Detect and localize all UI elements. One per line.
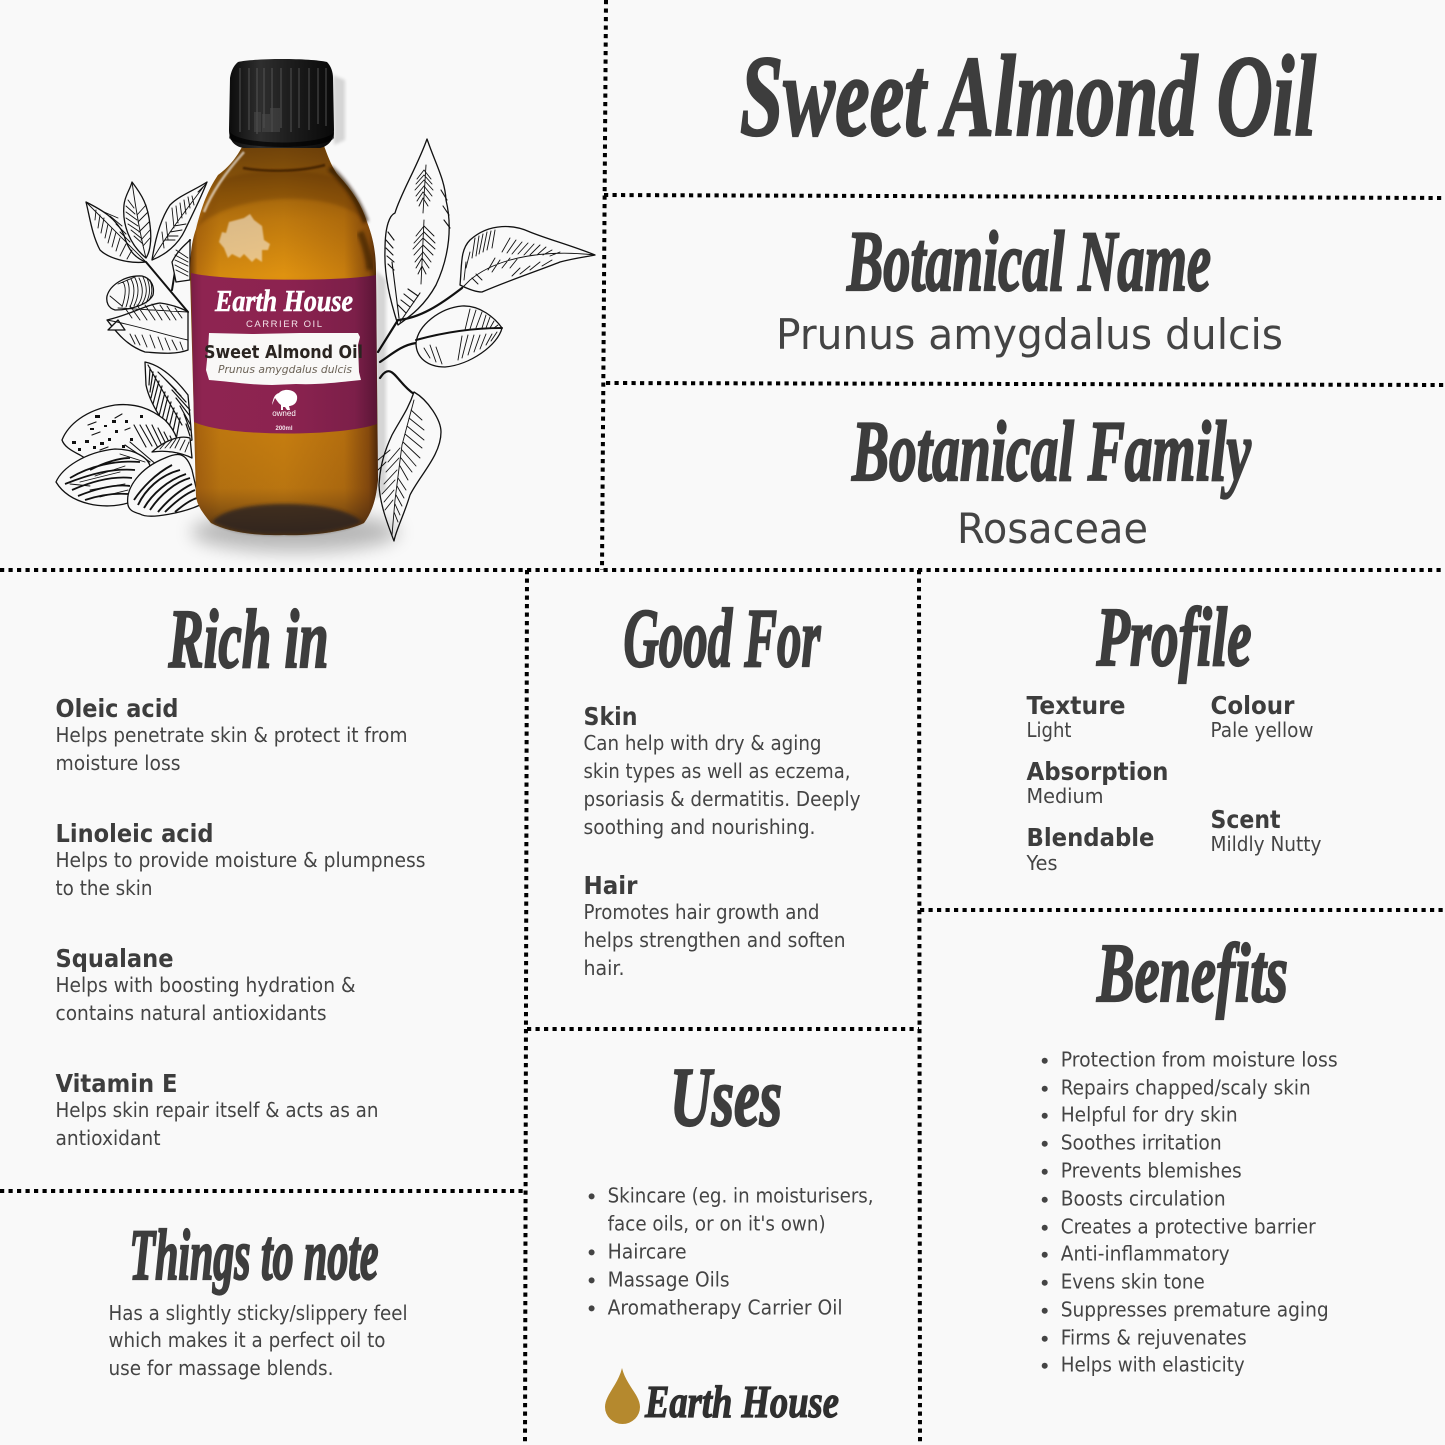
heading: Uses (670, 1051, 782, 1144)
label latin name: Prunus amygdalus dulcis (218, 364, 353, 376)
logo: earth house (605, 1368, 839, 1427)
item: squalane: Squalane (56, 944, 174, 973)
profile: texture: Light (1026, 718, 1072, 742)
neck oil line (243, 165, 325, 171)
profile: colour: Colour (1210, 691, 1295, 720)
heading: Profile (1096, 591, 1252, 684)
item: oleic acid: Helps penetrate skin & protect it from (56, 723, 408, 747)
heading: Rich in (168, 593, 328, 686)
note text: which makes it a perfect oil to (108, 1328, 386, 1352)
almond: speckled shell (62, 405, 180, 472)
item: skin: Skin (584, 702, 638, 731)
label white brush strip (206, 333, 361, 385)
bottle photograph drawn with gradients (190, 59, 399, 552)
profile: texture (1026, 691, 1126, 742)
profile: blendable: Blendable (1026, 823, 1154, 852)
label volume: 200ml (275, 426, 293, 432)
panel: profile (1026, 591, 1322, 875)
benefits list: Protection from moisture loss (1061, 1048, 1338, 1072)
profile: scent: Scent (1210, 805, 1281, 834)
item: oleic acid: Oleic acid (56, 694, 178, 723)
item: squalane (56, 944, 356, 1025)
benefits list: Firms & rejuvenates (1061, 1326, 1247, 1350)
benefits list: Prevents blemishes (1061, 1159, 1242, 1183)
heading: Botanical Name (846, 213, 1211, 309)
label (191, 273, 377, 434)
item: vitamin e: antioxidant (56, 1126, 160, 1150)
leaves: upper left sprig (86, 182, 207, 312)
profile: blendable: Yes (1026, 851, 1058, 875)
item: squalane: Helps with boosting hydration & (56, 973, 356, 997)
panel: things to note (108, 1215, 408, 1380)
item: skin: Can help with dry & aging (584, 731, 822, 755)
leaf: upper right (385, 139, 450, 325)
benefits list: Boosts circulation (1061, 1187, 1226, 1211)
item: vitamin e: Helps skin repair itself & acts as an (56, 1098, 378, 1122)
profile: scent (1210, 805, 1322, 856)
profile: colour: Pale yellow (1210, 718, 1314, 742)
panel: botanical name (776, 213, 1283, 359)
profile: blendable (1026, 823, 1154, 875)
note text (108, 1301, 408, 1380)
item: skin: psoriasis & dermatitis. Deeply (584, 787, 860, 811)
item: hair: helps strengthen and soften (584, 928, 846, 952)
leaf: left lower sprig (107, 303, 188, 353)
logo wordmark: Earth House (644, 1376, 839, 1427)
almond: left kernel (56, 449, 150, 506)
item: linoleic acid: Linoleic acid (56, 819, 214, 848)
benefits list: Evens skin tone (1061, 1270, 1205, 1294)
item: hair (584, 871, 846, 980)
almond: right kernel (128, 437, 200, 516)
icon: gold drop (605, 1368, 640, 1424)
benefits list: Anti-inflammatory (1061, 1242, 1230, 1266)
item: skin (584, 702, 860, 839)
item: linoleic acid: Helps to provide moisture & plumpness (56, 848, 426, 872)
profile: absorption: Medium (1026, 784, 1104, 808)
shell: almond on right (416, 306, 502, 367)
bottle cap (229, 59, 334, 148)
uses list: Skincare (eg. in moisturisers, (608, 1183, 874, 1207)
uses list: Haircare (608, 1239, 687, 1263)
uses list: Aromatherapy Carrier Oil (608, 1295, 843, 1319)
uses list (589, 1183, 874, 1319)
bottle glass (190, 141, 378, 535)
label product name: Sweet Almond Oil (204, 343, 363, 363)
item: skin: soothing and nourishing. (584, 815, 816, 839)
benefits list (1042, 1048, 1338, 1377)
bottle shadow (191, 512, 399, 552)
label owned: owned (272, 409, 296, 418)
benefits list: Helps with elasticity (1061, 1353, 1245, 1377)
benefits list: Creates a protective barrier (1061, 1215, 1316, 1239)
branch and stems (378, 288, 462, 394)
heading: Good For (624, 592, 821, 685)
leaf: lower right (378, 392, 441, 541)
item: hair: Promotes hair growth and (584, 900, 820, 924)
item: linoleic acid: to the skin (56, 876, 152, 900)
profile: scent: Mildly Nutty (1210, 832, 1322, 856)
icon: kiwi (272, 390, 297, 410)
label brand: Earth House (214, 283, 353, 318)
item: linoleic acid (56, 819, 426, 900)
profile: texture: Texture (1026, 691, 1126, 720)
label carrier oil: CARRIER OIL (246, 319, 322, 330)
panel: botanical family (851, 403, 1252, 553)
item: vitamin e (56, 1069, 378, 1150)
uses list: Massage Oils (608, 1267, 730, 1291)
value: Prunus amygdalus dulcis (776, 310, 1283, 359)
item: oleic acid (56, 694, 408, 775)
leaf: above almonds (145, 362, 192, 445)
nut: left on branch (107, 276, 153, 310)
panel: rich in (56, 593, 426, 1150)
glass reflection (219, 214, 270, 262)
profile: absorption (1026, 757, 1168, 808)
note text: use for massage blends. (108, 1356, 334, 1380)
item: vitamin e: Vitamin E (56, 1069, 178, 1098)
panel: good for (584, 592, 860, 980)
item: squalane: contains natural antioxidants (56, 1001, 326, 1025)
profile: colour (1210, 691, 1314, 742)
benefits list: Suppresses premature aging (1061, 1298, 1329, 1322)
profile: absorption: Absorption (1026, 757, 1168, 786)
benefits list: Repairs chapped/scaly skin (1061, 1076, 1311, 1100)
uses list: face oils, or on it's own) (608, 1211, 826, 1235)
leaf: far right (460, 227, 595, 292)
bottle base shadow (212, 504, 362, 534)
heading: Things to note (130, 1215, 378, 1295)
panel: uses (589, 1051, 874, 1427)
item: skin: skin types as well as eczema, (584, 759, 850, 783)
item: hair: hair. (584, 956, 624, 980)
value: Rosaceae (957, 504, 1148, 553)
note text: Has a slightly sticky/slippery feel (108, 1301, 408, 1325)
item: hair: Hair (584, 871, 638, 900)
item: oleic acid: moisture loss (56, 751, 180, 775)
benefits list: Soothes irritation (1061, 1131, 1222, 1155)
panel: botanical illustration and bottle (56, 59, 595, 552)
benefits list: Helpful for dry skin (1061, 1103, 1238, 1127)
panel: benefits (1042, 927, 1338, 1377)
heading: Benefits (1096, 927, 1288, 1020)
illustration: almond branches and leaves (56, 139, 595, 541)
